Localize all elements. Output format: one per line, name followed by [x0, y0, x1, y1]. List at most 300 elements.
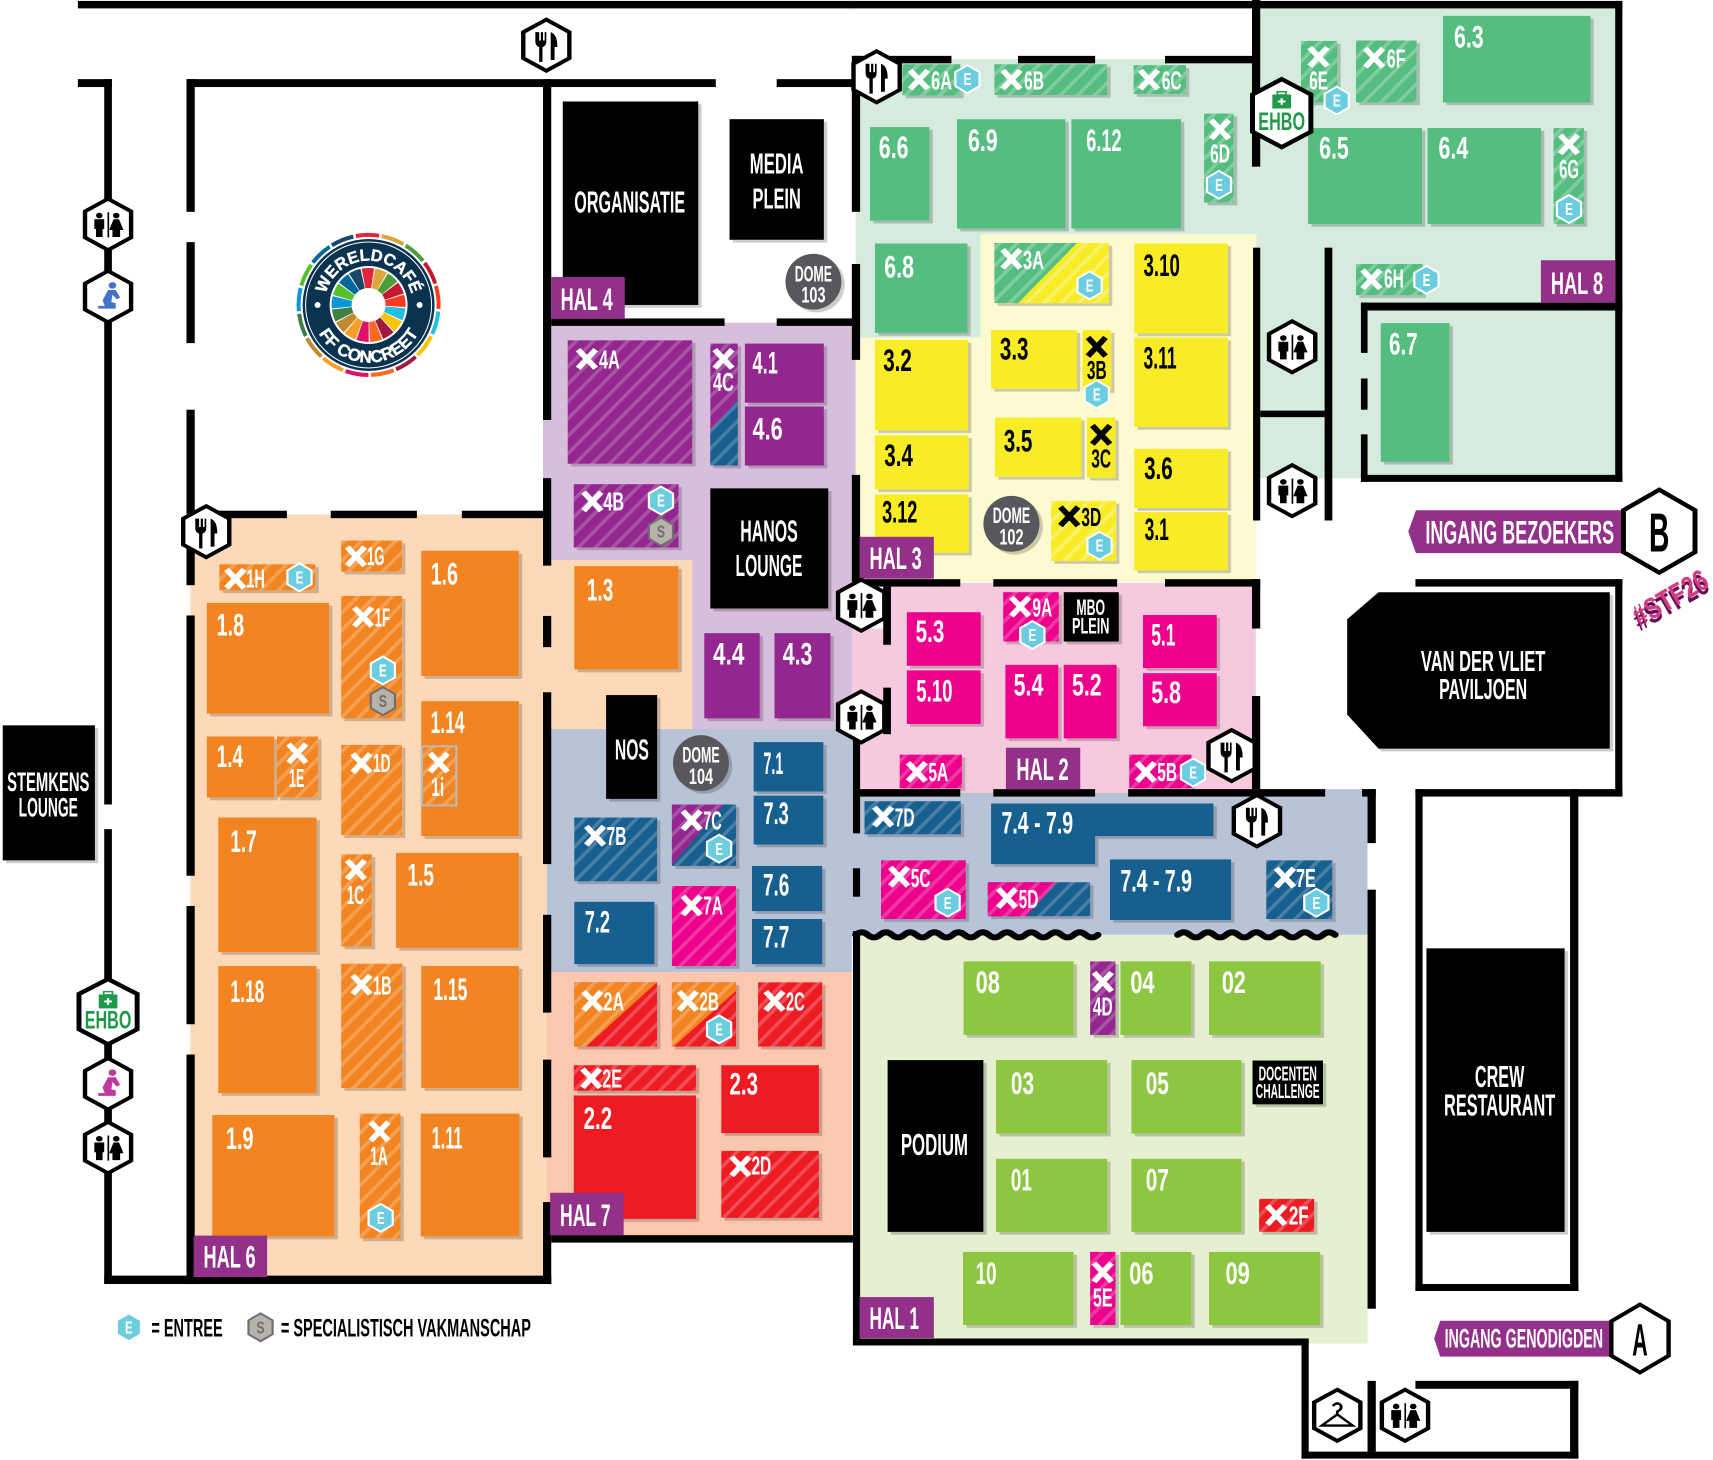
icon: food hal 7 — [1234, 795, 1280, 846]
stand 5.1: 5.1 — [1151, 618, 1175, 653]
stand 01 — [996, 1159, 1107, 1232]
stand 7.7: 7.7 — [763, 920, 789, 955]
stand 4C — [710, 344, 738, 466]
icon: food top — [523, 20, 569, 71]
black block: mbo plein: PLEIN — [1072, 614, 1109, 639]
icon: food hal 2 — [1208, 730, 1255, 781]
stand 3.5 — [995, 418, 1081, 477]
stand 5.10 — [907, 670, 981, 724]
stand 7B: 7B — [607, 822, 626, 851]
stand 7.6 — [752, 866, 822, 911]
stand 5A — [900, 755, 962, 788]
dome 104 — [673, 735, 729, 791]
stand 3.2: 3.2 — [883, 344, 912, 378]
stand 7.2: 7.2 — [585, 905, 610, 940]
stand 1H: 1H — [246, 565, 265, 594]
stand 3C: 3C — [1091, 445, 1111, 474]
stand 3D: E — [1096, 536, 1103, 556]
hal 2 label — [1006, 748, 1080, 789]
stand 6.8 — [875, 243, 967, 333]
hall backgrounds east — [850, 5, 1619, 1344]
dome 103 — [785, 254, 841, 310]
stand 5C: E — [944, 893, 952, 913]
black block: van der vliet paviljoen: VAN DER VLIET — [1421, 645, 1545, 677]
icon: food hal 8 — [853, 51, 900, 102]
stand 6A: 6A — [931, 67, 952, 96]
legend: S — [256, 1319, 265, 1338]
building walls west — [78, 1, 859, 1284]
stand 2.3: 2.3 — [730, 1067, 758, 1102]
stand 7.4-7.9 east — [1110, 859, 1231, 920]
stand 4B — [574, 484, 679, 548]
stand 6E: E — [1333, 91, 1341, 111]
stand 3.12: 3.12 — [882, 495, 917, 530]
stand 6.9: 6.9 — [968, 123, 998, 158]
black block: hanos lounge — [710, 488, 828, 608]
stand 3.10: 3.10 — [1144, 249, 1180, 283]
stand 3D: 3D — [1081, 503, 1101, 532]
dome 102 — [983, 496, 1040, 552]
stand 2A — [574, 982, 657, 1047]
stand 5.4: 5.4 — [1014, 668, 1043, 703]
dome 102: DOME — [993, 504, 1030, 528]
stand 6.6: 6.6 — [879, 130, 909, 165]
stand 6G: E — [1565, 200, 1573, 220]
stand 7.4-7.9 west: 7.4 - 7.9 — [1002, 806, 1073, 841]
icon: toilets hal 8 lower — [1269, 465, 1315, 516]
legend: E — [125, 1319, 133, 1338]
stand 4B: 4B — [603, 488, 624, 517]
stand 2.3 — [721, 1065, 819, 1133]
stand 3.10 — [1134, 243, 1228, 333]
black block: crew restaurant — [1426, 948, 1565, 1232]
dome 103: 103 — [801, 283, 826, 308]
stand 1.5 — [396, 853, 519, 948]
stand 1H: E — [296, 569, 303, 588]
stand 4.6: 4.6 — [753, 412, 783, 447]
stand 1.3 — [574, 566, 679, 669]
stand 06 — [1120, 1252, 1191, 1325]
icon: entrance b hexagon — [1623, 490, 1695, 573]
stand 1i: 1i — [431, 773, 444, 803]
stand 7.4-7.9 west — [991, 804, 1213, 864]
text: STEMKENS — [7, 767, 89, 797]
stand 3B — [1082, 330, 1111, 408]
black block: hanos lounge: HANOS — [740, 515, 798, 549]
black block: stemkens lounge: LOUNGE — [19, 793, 78, 823]
stand 7.7 — [752, 919, 822, 964]
stand 1F: S — [379, 693, 387, 712]
stand 2D — [721, 1151, 819, 1218]
icon: first aid ehbo hal 8: EHBO — [1258, 107, 1305, 135]
stand 6.3 — [1443, 16, 1590, 102]
east half of the floor plan: DOCENTEN — [1259, 1062, 1317, 1085]
stand 4.1 — [745, 344, 824, 403]
icon: food hal 6 — [183, 506, 229, 557]
stand 6A: E — [964, 70, 971, 90]
stand 7E — [1266, 860, 1332, 919]
stand 6.7 — [1381, 323, 1450, 462]
stand 04 — [1120, 961, 1191, 1035]
stand 6.3: 6.3 — [1454, 20, 1484, 55]
stand 1F: E — [379, 662, 387, 681]
stand 09 — [1209, 1252, 1320, 1325]
stand 2B: E — [715, 1021, 723, 1040]
hal 8 label: HAL 8 — [1551, 266, 1603, 301]
stand 7D: 7D — [895, 804, 915, 833]
stand 5.2: 5.2 — [1072, 668, 1102, 703]
hal 7 label: HAL 7 — [560, 1198, 610, 1233]
wavy wall hal 1 — [856, 932, 1335, 937]
stand 6F: 6F — [1387, 45, 1406, 74]
stand 1C: 1C — [347, 881, 364, 911]
east half of the floor plan — [838, 16, 1695, 1441]
stand 5D: 5D — [1019, 885, 1038, 914]
logo: wereldcafe ff concreet — [296, 232, 441, 377]
stand 2D: 2D — [751, 1152, 771, 1181]
legend — [117, 1313, 531, 1342]
stand 2F — [1259, 1199, 1314, 1232]
stand 7.2 — [574, 902, 654, 964]
stand 1.3: 1.3 — [587, 573, 613, 608]
icon: prayer room pink — [85, 1058, 131, 1109]
stand 3A — [994, 243, 1109, 303]
stand 1G: 1G — [367, 542, 385, 572]
stand 1.4: 1.4 — [217, 740, 243, 775]
dome 103: DOME — [795, 262, 832, 287]
black block: mbo plein — [1064, 592, 1119, 642]
stand 4A: 4A — [599, 346, 620, 375]
stand 6H: 6H — [1384, 265, 1404, 294]
stand 7.1: 7.1 — [764, 747, 783, 782]
black block: media plein: PLEIN — [753, 182, 801, 215]
stand 4D — [1090, 961, 1115, 1035]
stand 2A: 2A — [603, 987, 624, 1017]
east half of the floor plan: CHALLENGE — [1256, 1080, 1320, 1103]
icon: wardrobe hanger — [1314, 1390, 1360, 1441]
entrance b banner — [1408, 510, 1623, 553]
stand 6A — [902, 64, 980, 96]
stand 08: 08 — [976, 966, 1000, 1000]
stand 3.3: 3.3 — [1000, 332, 1029, 367]
stand 1B — [341, 964, 403, 1088]
stand 7.1 — [754, 742, 823, 791]
stand 4.4 — [704, 633, 760, 718]
entrance a banner — [1434, 1321, 1612, 1357]
stand 1.11 — [421, 1114, 519, 1237]
black block: crew restaurant: CREW — [1475, 1061, 1525, 1094]
stand 7.3 — [754, 796, 823, 845]
black block: van der vliet paviljoen: PAVILJOEN — [1439, 673, 1527, 705]
stand 1B: 1B — [373, 972, 392, 1001]
stand 10: 10 — [976, 1257, 997, 1291]
logo: wereldcafe ff concreet: FF CONCREET — [319, 326, 417, 363]
stand 6H: E — [1423, 270, 1430, 290]
stand 1.18 — [218, 966, 316, 1093]
text: ORGANISATIE — [574, 186, 685, 220]
stand 6.4 — [1428, 128, 1541, 224]
stand 4.6 — [745, 406, 824, 466]
stand 6.7: 6.7 — [1389, 327, 1418, 362]
stand 6.8: 6.8 — [884, 250, 914, 285]
stand 2C: 2C — [786, 987, 805, 1017]
black block: mbo plein: MBO — [1076, 596, 1105, 620]
stand 1.6 — [421, 551, 519, 676]
stand 01: 01 — [1011, 1163, 1032, 1198]
stand 1.7: 1.7 — [230, 825, 257, 859]
stand 3.1 — [1134, 512, 1228, 570]
icon: first aid ehbo left — [79, 979, 137, 1044]
stand 1D: 1D — [373, 749, 391, 778]
icon: prayer room blue — [85, 271, 131, 322]
stand 1.14: 1.14 — [431, 706, 465, 741]
stand 5B — [1129, 755, 1205, 788]
stand 1.7 — [218, 818, 316, 952]
stand 1E — [277, 737, 318, 798]
stand 1H — [219, 563, 315, 594]
icon: toilets hal 2 lower — [838, 691, 884, 743]
stand 7A — [672, 886, 736, 966]
hal 6 label — [194, 1236, 267, 1277]
stand 5.4 — [1005, 665, 1058, 738]
dome 104: 104 — [689, 765, 713, 789]
stand 1.4 — [207, 737, 274, 798]
hal 4 label: HAL 4 — [561, 283, 613, 317]
stand 06: 06 — [1129, 1257, 1153, 1291]
stand 7E: E — [1313, 893, 1320, 913]
hal 2 label: HAL 2 — [1016, 752, 1069, 787]
stand 4D: 4D — [1093, 993, 1113, 1022]
stand 5.1 — [1143, 615, 1217, 668]
stand 4B: E — [657, 492, 665, 511]
stand 2.2: 2.2 — [584, 1102, 612, 1136]
stand 3.6 — [1134, 449, 1228, 508]
stand 5A: 5A — [928, 758, 948, 788]
stand 3.4 — [875, 435, 969, 489]
stand 2E: 2E — [602, 1065, 622, 1094]
stand 2C — [758, 982, 822, 1047]
stand 3.12 — [875, 494, 969, 553]
stand 1E: 1E — [289, 764, 304, 793]
black block: media plein — [730, 119, 824, 240]
stand 9A: E — [1029, 626, 1036, 646]
stand 5.8 — [1143, 673, 1217, 726]
stand 3.2 — [875, 340, 968, 430]
stand 6G — [1554, 128, 1584, 224]
stand 3.3 — [991, 330, 1077, 389]
icon: first aid ehbo left: EHBO — [85, 1006, 131, 1034]
icon: entrance b hexagon: B — [1649, 502, 1669, 564]
stand 3.1: 3.1 — [1145, 513, 1169, 547]
stand 7.4-7.9 east: 7.4 - 7.9 — [1120, 864, 1192, 899]
stand 03 — [996, 1060, 1107, 1134]
stand 1.14 — [421, 701, 519, 836]
stand 6.6 — [870, 127, 929, 221]
stand 7C: 7C — [703, 807, 722, 836]
stand 1C — [341, 854, 372, 946]
stand 5E: 5E — [1093, 1284, 1113, 1313]
black block: organisatie — [563, 101, 698, 305]
stand 6D: E — [1215, 175, 1223, 195]
stand 10 — [963, 1252, 1074, 1325]
stand 2.2 — [574, 1095, 696, 1219]
stand 2B — [672, 982, 736, 1047]
stand 6.5 — [1308, 128, 1422, 224]
stand 1G — [341, 541, 402, 572]
hal 1 label: HAL 1 — [869, 1302, 919, 1336]
icon: first aid ehbo hal 8 — [1253, 79, 1311, 147]
logo: wereldcafe ff concreet: WERELDCAFÉ — [314, 249, 424, 294]
stand 1.5: 1.5 — [408, 858, 434, 893]
stand 4.1: 4.1 — [753, 346, 778, 381]
stand 3C — [1087, 418, 1115, 478]
stand 6C: 6C — [1162, 67, 1182, 96]
dome 104: DOME — [682, 743, 720, 768]
stand 1.15: 1.15 — [433, 973, 467, 1007]
stand 7.6: 7.6 — [763, 868, 789, 903]
stand 6.4: 6.4 — [1439, 131, 1468, 166]
stand 3.6: 3.6 — [1144, 452, 1173, 486]
building walls east — [850, 0, 1622, 1459]
hal 3 label — [860, 537, 934, 579]
black block: nos: NOS — [615, 733, 649, 766]
stand 6.12 — [1071, 119, 1181, 229]
stand 4B: S — [657, 523, 665, 542]
stand 6D — [1204, 114, 1234, 203]
stand 6D: 6D — [1210, 140, 1230, 169]
stand 1i — [422, 746, 456, 805]
black block: stemkens lounge — [3, 725, 95, 860]
icon: entrance a hexagon — [1611, 1305, 1669, 1372]
stand 1A: 1A — [370, 1142, 388, 1171]
hal 7 label — [550, 1193, 624, 1235]
stand 3D — [1051, 501, 1116, 561]
hal 4 label — [551, 277, 625, 319]
stand 9A — [1003, 592, 1059, 649]
stand 4.4: 4.4 — [713, 637, 744, 672]
stand 5B: 5B — [1157, 758, 1177, 788]
stand 5E — [1090, 1252, 1115, 1325]
stand 02 — [1209, 961, 1321, 1035]
stand 6E — [1301, 41, 1349, 115]
stand 9A: 9A — [1032, 594, 1052, 623]
hal 3 label: HAL 3 — [869, 542, 922, 576]
black block: media plein: MEDIA — [750, 147, 804, 180]
stand 3.4: 3.4 — [884, 439, 913, 473]
stand 3A: E — [1086, 276, 1094, 296]
stand 4A — [568, 340, 692, 464]
stand 1.8 — [207, 603, 329, 714]
icon: toilets hal 8 upper — [1269, 321, 1315, 372]
stand 08 — [964, 961, 1074, 1035]
stand 1.18: 1.18 — [230, 974, 264, 1009]
stand 3B: 3B — [1087, 356, 1107, 385]
stand 1.8: 1.8 — [217, 608, 244, 643]
stand 5.8: 5.8 — [1151, 676, 1181, 710]
stand 09: 09 — [1226, 1257, 1250, 1291]
stand 6.12: 6.12 — [1086, 123, 1122, 158]
stand 6E: 6E — [1309, 67, 1328, 96]
stand 1.9 — [212, 1115, 335, 1237]
stand 6C — [1134, 65, 1186, 96]
stand 1F: 1F — [375, 604, 390, 633]
stand 1F — [341, 596, 402, 718]
stand 4C: 4C — [713, 368, 734, 397]
stand 6.5: 6.5 — [1319, 131, 1349, 166]
stand 04: 04 — [1130, 966, 1155, 1000]
black block: podium — [888, 1060, 983, 1232]
icon: toilets entrance — [1382, 1390, 1428, 1441]
icon: entrance a hexagon: A — [1632, 1315, 1648, 1366]
stand 5D — [988, 882, 1090, 916]
stand 05: 05 — [1146, 1067, 1169, 1101]
stand 3A: 3A — [1023, 246, 1044, 275]
stand 1.11: 1.11 — [432, 1121, 462, 1156]
icon: toilets hexagon left bottom — [85, 1122, 131, 1173]
dome 102: 102 — [999, 526, 1024, 550]
stand 3.11: 3.11 — [1144, 341, 1177, 376]
stand 5.2 — [1064, 665, 1117, 738]
stand 5.3 — [907, 612, 981, 666]
stand 03: 03 — [1011, 1067, 1034, 1101]
stand 05 — [1131, 1060, 1242, 1134]
stand 1.15 — [421, 966, 519, 1088]
black block: podium: PODIUM — [901, 1129, 968, 1162]
stand 3.11 — [1134, 338, 1228, 427]
icon: toilets hexagon left top — [85, 199, 131, 250]
stand 5.3: 5.3 — [916, 615, 944, 649]
stand 5B: E — [1189, 763, 1197, 783]
stand 6B: 6B — [1024, 67, 1044, 96]
hall backgrounds west — [190, 323, 856, 1278]
stand 5C — [881, 860, 966, 919]
stand 2F: 2F — [1289, 1202, 1309, 1231]
stand 5C: 5C — [911, 864, 931, 893]
stand 6.9 — [957, 119, 1065, 229]
stand 7B — [574, 818, 657, 881]
stand 7.3: 7.3 — [764, 797, 789, 831]
stand 4.3 — [774, 633, 830, 718]
black block: van der vliet paviljoen — [1347, 592, 1610, 749]
stand 6G: 6G — [1559, 155, 1579, 184]
stand 1.9: 1.9 — [226, 1122, 253, 1156]
stand 6H — [1356, 264, 1439, 295]
stand 1D — [341, 745, 402, 835]
stand 1A — [360, 1114, 400, 1238]
hal 6 label: HAL 6 — [203, 1240, 256, 1275]
stand 07 — [1131, 1159, 1242, 1232]
stand 7E: 7E — [1296, 864, 1316, 893]
stand 4.3: 4.3 — [783, 637, 812, 672]
stand 2B: 2B — [699, 987, 719, 1017]
hal 1 label — [860, 1297, 934, 1338]
stand 7A: 7A — [703, 891, 723, 921]
stand 2E — [574, 1065, 696, 1094]
stand 1.6: 1.6 — [431, 557, 458, 592]
stand 1A: E — [377, 1209, 385, 1229]
stand 7C — [672, 804, 736, 866]
stand 02: 02 — [1222, 966, 1246, 1000]
text: = SPECIALISTISCH VAKMANSCHAP — [281, 1314, 531, 1342]
stand 3.5: 3.5 — [1004, 424, 1032, 459]
stand 5.10: 5.10 — [916, 674, 953, 709]
stand 07: 07 — [1146, 1163, 1169, 1198]
stand 6B — [994, 64, 1107, 96]
east half of the floor plan: RESTAURANT — [1444, 1089, 1555, 1123]
black block: hanos lounge: LOUNGE — [736, 549, 802, 583]
black block: docenten challenge — [1253, 1061, 1323, 1104]
stand 6F — [1356, 41, 1417, 102]
